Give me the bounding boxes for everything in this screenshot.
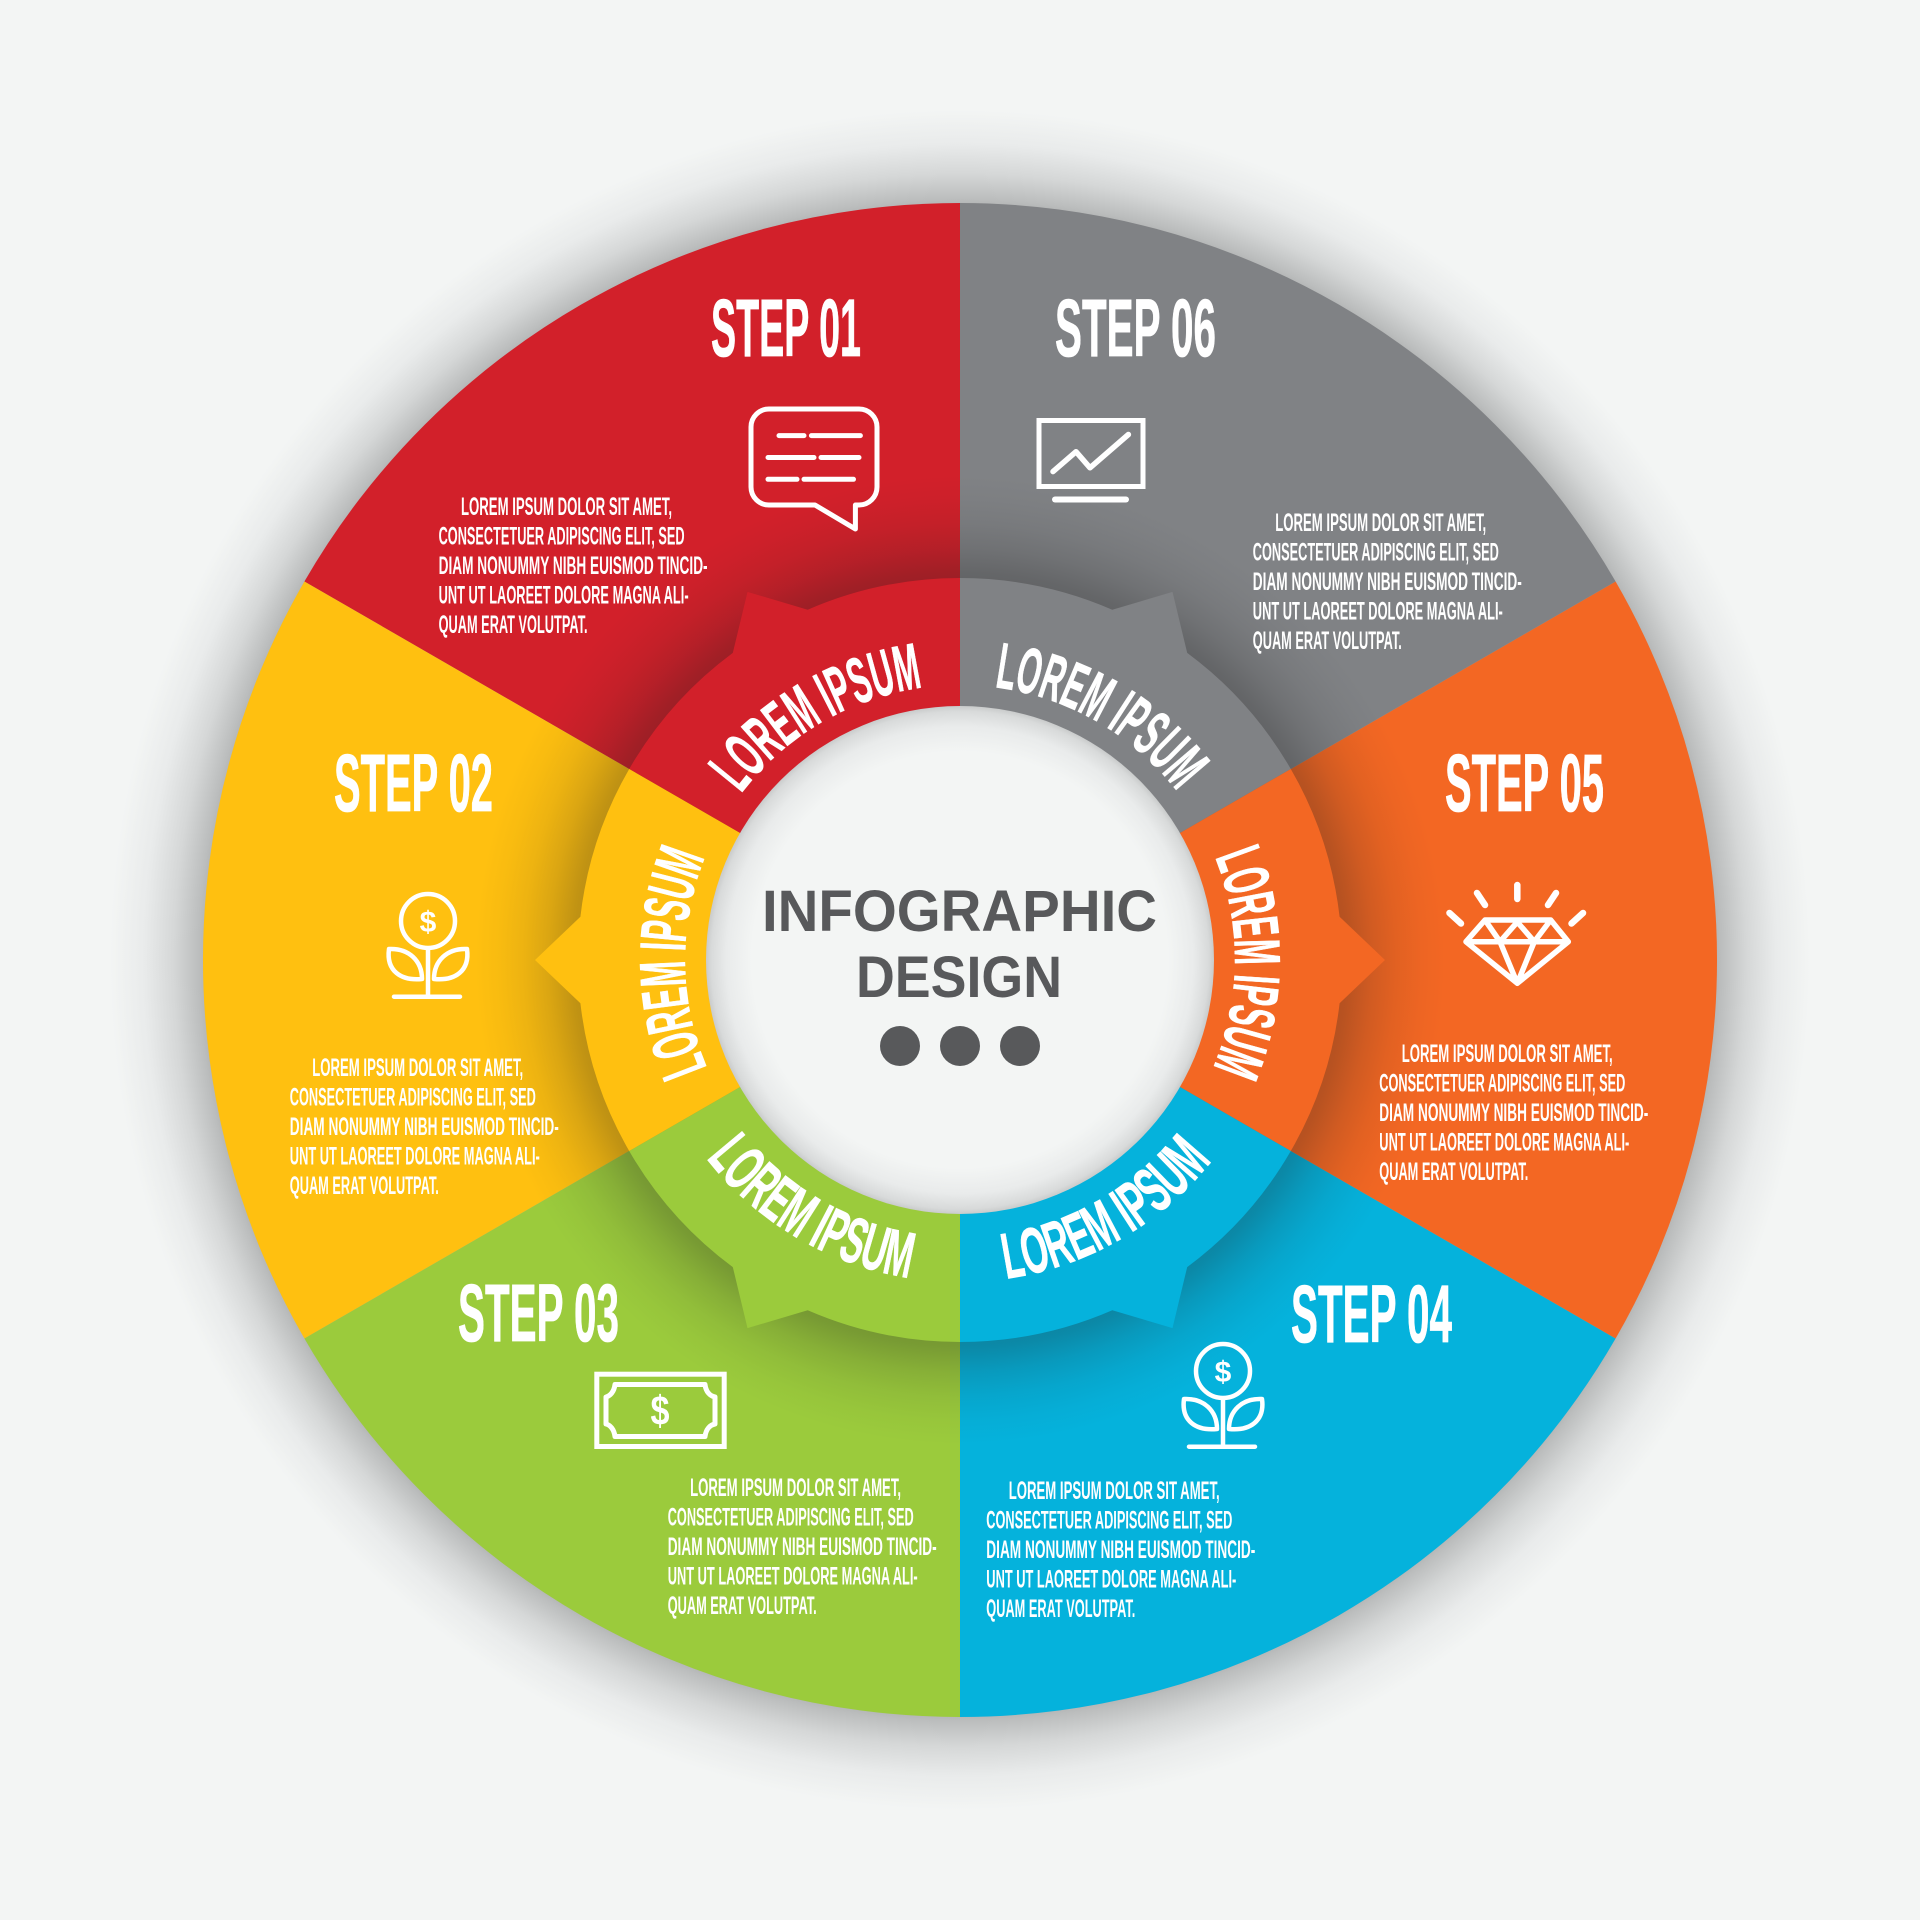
text block: step 05: CONSECTETUER ADIPISCING ELIT, SED [1379, 1070, 1625, 1098]
panel: step 03 [458, 1268, 937, 1620]
panel: step 02: STEP 02 [334, 738, 493, 829]
ring label: orange: LOREM IPSUM [1214, 844, 1280, 1082]
text: STEP 04 [1291, 1269, 1452, 1360]
segment: step 06 gray [960, 203, 1616, 960]
panel: step 06 [1039, 283, 1522, 655]
title line 2: DESIGN [856, 945, 1062, 1010]
center circle [706, 706, 1214, 1214]
panel: step 05 [1379, 738, 1648, 1186]
text block: step 05: UNT UT LAOREET DOLORE MAGNA ALI- [1379, 1128, 1629, 1156]
ring label: blue: LOREM IPSUM [1000, 1132, 1211, 1279]
segment: step 03 green [304, 960, 960, 1717]
text block: step 05: QUAM ERAT VOLUTPAT. [1379, 1158, 1528, 1186]
text block: step 06: CONSECTETUER ADIPISCING ELIT, SED [1253, 538, 1499, 566]
panel: step 02 [290, 738, 559, 1200]
inner ring cast shadow [475, 475, 1445, 1445]
center title [762, 879, 1157, 1066]
ring labels [640, 642, 1280, 1279]
icon: banknote: $ [650, 1387, 670, 1434]
icon: speech bubble [751, 409, 877, 529]
text block: step 01: QUAM ERAT VOLUTPAT. [439, 611, 588, 639]
icon: money plant [389, 894, 467, 997]
title line 1: INFOGRAPHIC [762, 879, 1157, 944]
text block: step 02 [290, 1054, 559, 1200]
text block: step 04: QUAM ERAT VOLUTPAT. [986, 1595, 1135, 1623]
text block: step 03: QUAM ERAT VOLUTPAT. [668, 1592, 817, 1620]
three dots [880, 1026, 1040, 1066]
text block: step 01 [439, 493, 708, 639]
text block: step 03: CONSECTETUER ADIPISCING ELIT, SED [668, 1504, 914, 1532]
panel: step 04 [986, 1269, 1452, 1623]
inner gear ring [535, 578, 1385, 1342]
panel: step 05: STEP 05 [1445, 738, 1604, 829]
text block: step 01: CONSECTETUER ADIPISCING ELIT, SED [439, 522, 685, 550]
icon: money plant: $ [1215, 1356, 1232, 1389]
text block: step 06: DIAM NONUMMY NIBH EUISMOD TINCID- [1253, 568, 1522, 596]
text block: step 03 [668, 1474, 937, 1620]
text block: step 02: UNT UT LAOREET DOLORE MAGNA ALI- [290, 1142, 540, 1170]
text block: step 05: DIAM NONUMMY NIBH EUISMOD TINCID- [1379, 1099, 1648, 1127]
text block: step 01: DIAM NONUMMY NIBH EUISMOD TINCID- [439, 552, 708, 580]
ring segment: blue [960, 960, 1291, 1342]
segment: step 01 red [304, 203, 960, 960]
text block: step 03: UNT UT LAOREET DOLORE MAGNA ALI- [668, 1562, 918, 1590]
ring label: yellow: LOREM IPSUM [640, 844, 706, 1082]
text block: step 02: DIAM NONUMMY NIBH EUISMOD TINCID- [290, 1113, 559, 1141]
ring segment: green [629, 960, 960, 1342]
text block: step 06 [1253, 509, 1522, 655]
text block: step 02: LOREM IPSUM DOLOR SIT AMET, [312, 1054, 523, 1082]
icon: banknote [597, 1374, 724, 1446]
ring segment: orange [960, 769, 1385, 1151]
text block: step 03: LOREM IPSUM DOLOR SIT AMET, [690, 1474, 901, 1502]
text block: step 04 [986, 1477, 1255, 1623]
text block: step 04: CONSECTETUER ADIPISCING ELIT, SED [986, 1506, 1232, 1534]
text block: step 01: UNT UT LAOREET DOLORE MAGNA ALI- [439, 582, 689, 610]
ring label: green: LOREM IPSUM [707, 1131, 916, 1278]
text block: step 04: DIAM NONUMMY NIBH EUISMOD TINCID- [986, 1536, 1255, 1564]
panel: step 03: STEP 03 [458, 1268, 619, 1359]
icon: diamond [1450, 885, 1583, 983]
ring segment: gray [960, 578, 1291, 960]
text block: step 06: UNT UT LAOREET DOLORE MAGNA ALI- [1253, 598, 1503, 626]
wheel drop shadow [110, 110, 1810, 1810]
icon: money plant: $ [420, 906, 437, 939]
panel: step 01: STEP 01 [711, 283, 861, 374]
icon: money plant [1184, 1344, 1262, 1447]
text block: step 01: LOREM IPSUM DOLOR SIT AMET, [461, 493, 672, 521]
ring segment: red [629, 578, 960, 960]
panel: step 01 [439, 283, 877, 639]
text block: step 02: CONSECTETUER ADIPISCING ELIT, SED [290, 1084, 536, 1112]
outer wheel segments [203, 203, 1717, 1717]
text block: step 05: LOREM IPSUM DOLOR SIT AMET, [1402, 1040, 1613, 1068]
segment: step 04 blue [960, 960, 1616, 1717]
ring label: gray: LOREM IPSUM [996, 642, 1210, 790]
text block: step 03: DIAM NONUMMY NIBH EUISMOD TINCID- [668, 1533, 937, 1561]
text block: step 04: UNT UT LAOREET DOLORE MAGNA ALI- [986, 1566, 1236, 1594]
text block: step 04: LOREM IPSUM DOLOR SIT AMET, [1009, 1477, 1220, 1505]
segment: step 05 orange [960, 582, 1717, 1338]
panel: step 06: STEP 06 [1055, 283, 1216, 374]
text block: step 06: LOREM IPSUM DOLOR SIT AMET, [1275, 509, 1486, 537]
ring segment: yellow [535, 769, 960, 1151]
segment: step 02 yellow [203, 582, 960, 1338]
ring label: red: LOREM IPSUM [707, 643, 921, 792]
text block: step 06: QUAM ERAT VOLUTPAT. [1253, 627, 1402, 655]
text block: step 02: QUAM ERAT VOLUTPAT. [290, 1172, 439, 1200]
icon: monitor chart [1039, 420, 1143, 500]
text block: step 05 [1379, 1040, 1648, 1186]
